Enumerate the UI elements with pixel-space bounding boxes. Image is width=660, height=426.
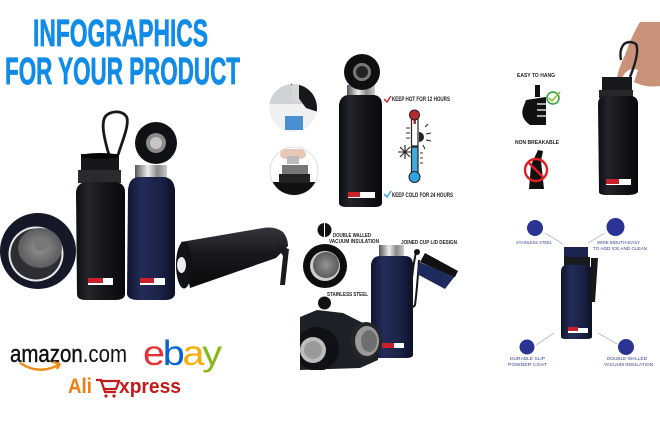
icon: hand holding bottle	[522, 85, 546, 125]
bottle with strap	[561, 247, 598, 339]
feature: powder coat: POWDER COAT	[508, 362, 547, 367]
icon: no breaking bottle	[525, 150, 547, 189]
icon: check	[547, 92, 560, 104]
photo circle: pouring	[269, 84, 320, 132]
title	[5, 13, 240, 93]
panel: features	[508, 218, 653, 367]
bottle lid: front view	[0, 213, 76, 289]
feature: double walled: VACUUM INSULATION	[604, 362, 653, 367]
photo circle: ice	[268, 147, 320, 196]
panel: easy to hang	[515, 22, 660, 195]
label: easy to hang: EASY TO HANG	[517, 73, 555, 79]
icon: double wall	[318, 223, 332, 237]
logo: AliExpress	[68, 375, 181, 398]
label: hot	[384, 96, 450, 103]
hand	[617, 22, 660, 86]
feature: wide mouth: TO ADD ICE AND CLEAN	[593, 246, 647, 251]
feature: stainless steel: STAINLESS STEEL	[516, 240, 552, 245]
label: double walled: DOUBLE WALLED	[333, 233, 371, 239]
bottle with lid open	[339, 54, 382, 207]
feature: powder coat: DURABLE SLIP	[510, 356, 545, 361]
icon: amazon smile	[20, 362, 60, 370]
title: FOR YOUR PRODUCT	[5, 51, 240, 93]
bottle: lying on its side	[176, 228, 289, 288]
title: INFOGRAPHICS	[33, 13, 208, 55]
logo: AliExpress: xpress	[119, 376, 181, 398]
bottle lying with steel opening	[295, 310, 382, 371]
panel: materials	[295, 223, 458, 371]
bottle with hand	[598, 22, 660, 195]
feature: powder coat	[508, 333, 554, 367]
icon: thermometer	[398, 110, 431, 182]
label: hot: KEEP HOT FOR 12 HOURS	[392, 97, 450, 103]
label: double walled	[329, 233, 379, 245]
icon: cart	[96, 380, 119, 392]
panel: hot and cold	[268, 54, 453, 207]
label: cold	[384, 191, 453, 199]
logo: ebay: ebay	[143, 333, 222, 372]
feature: stainless steel	[516, 220, 563, 245]
icon: steel badge	[318, 296, 331, 310]
logo: amazon.com: amazon.com	[10, 341, 127, 368]
label: joined lid: JOINED CUP LID DESIGN	[401, 240, 457, 246]
label: cold: KEEP COLD FOR 24 HOURS	[392, 193, 453, 199]
label: non breakable: NON BREAKABLE	[515, 140, 559, 146]
label: stainless steel: STAINLESS STEEL	[327, 292, 368, 298]
feature: wide mouth	[588, 218, 647, 251]
bottle navy with attached lid	[371, 245, 458, 358]
bottle lid	[303, 244, 347, 288]
feature: double walled: DOUBLE-WALLED	[607, 356, 648, 361]
feature: double walled	[598, 333, 653, 367]
logo: AliExpress: Ali	[68, 375, 92, 398]
bottle: navy with open lid	[127, 122, 177, 300]
product photo: bottle group	[0, 112, 289, 300]
label: double walled: VACUUM INSULATION	[329, 239, 379, 245]
feature: wide mouth: WIDE MOUTH-EASY	[597, 240, 640, 245]
bottle: black with loop	[76, 112, 127, 300]
